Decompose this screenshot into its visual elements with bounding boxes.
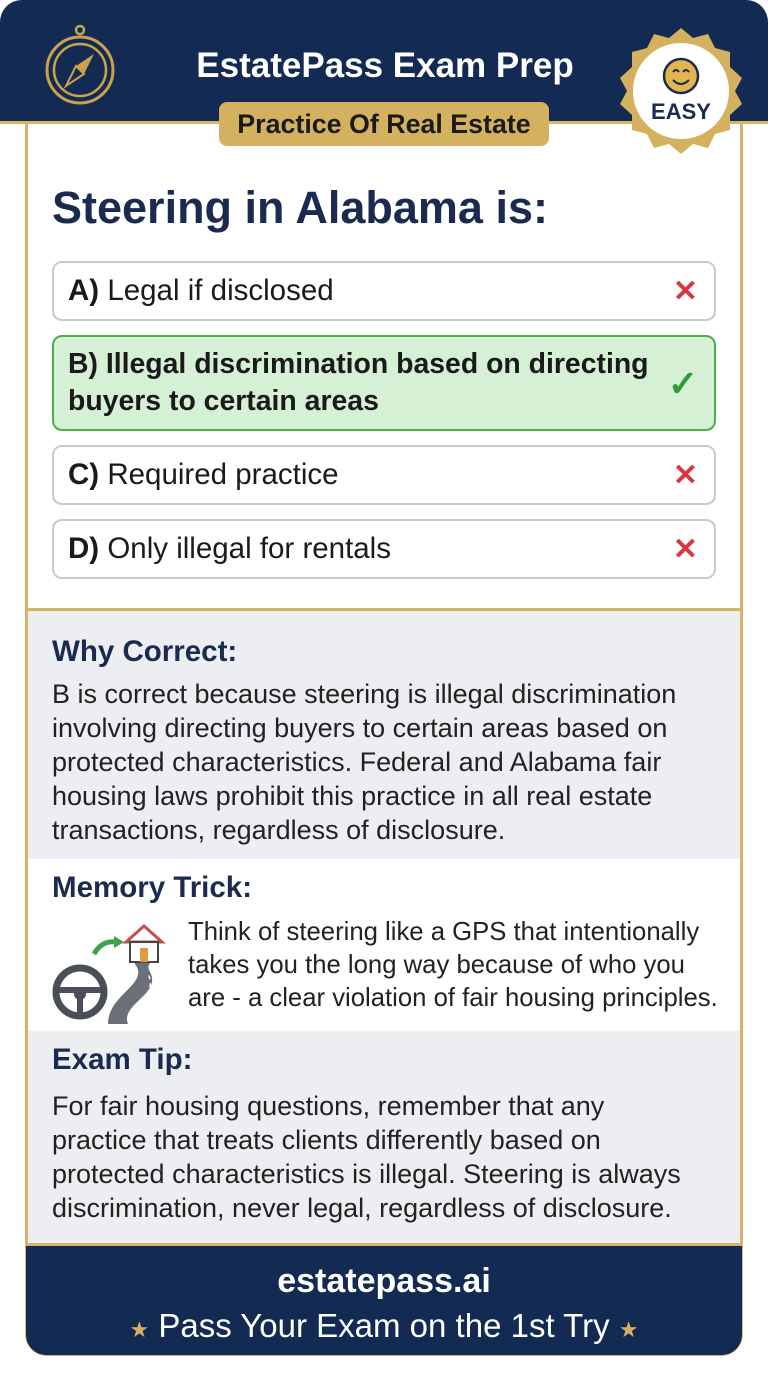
panel: exam tip: discrimination, never legal, regardless of disclosure. — [52, 1193, 672, 1223]
panel: memory trick: takes you the long way because of who you — [188, 951, 685, 979]
icon: steering wheel road house — [52, 924, 166, 1024]
question: Steering in Alabama is: — [52, 182, 548, 233]
panel: why correct: Why Correct: — [52, 635, 237, 668]
option C — [52, 445, 716, 505]
icon: compass — [46, 24, 114, 104]
option D — [52, 519, 716, 579]
panel: why correct: housing laws prohibit this practice in all real estate — [52, 781, 652, 811]
panel: exam tip: For fair housing questions, remember that any — [52, 1091, 604, 1121]
panel: why correct: involving directing buyers to certain areas based on — [52, 713, 667, 743]
panel: memory trick: Memory Trick: — [52, 871, 252, 904]
panel: exam tip — [28, 1031, 740, 1243]
option D: Only illegal for rentals — [107, 532, 391, 565]
option C: ✕ — [673, 458, 698, 492]
panel: exam tip: practice that treats clients differently based on — [52, 1125, 601, 1155]
option C: Required practice — [107, 458, 339, 491]
panel: why correct — [28, 608, 740, 859]
option A: Legal if disclosed — [107, 274, 334, 307]
option A — [52, 261, 716, 321]
footer: ★ Pass Your Exam on the 1st Try ★ — [129, 1307, 639, 1344]
footer — [26, 1243, 742, 1355]
panel: memory trick: Think of steering like a GPS that intentionally — [188, 918, 699, 946]
title: EstatePass Exam Prep — [196, 46, 574, 85]
panel: exam tip: protected characteristics is illegal. Steering is always — [52, 1159, 681, 1189]
option B correct — [52, 335, 716, 431]
option D: ✕ — [673, 532, 698, 566]
header — [0, 0, 768, 124]
subtitle badge: Practice Of Real Estate — [237, 109, 531, 139]
option C: C) — [68, 458, 99, 491]
panel: memory trick — [28, 859, 740, 1031]
panel: why correct: B is correct because steering is illegal discrimination — [52, 679, 676, 709]
panel: why correct: transactions, regardless of disclosure. — [52, 815, 505, 845]
option B correct: buyers to certain areas — [68, 385, 379, 417]
option A: ✕ — [673, 274, 698, 308]
option A: A) — [68, 274, 99, 307]
panel: why correct: protected characteristics. Federal and Alabama fair — [52, 747, 661, 777]
badge: easy — [620, 28, 742, 154]
badge: easy: EASY — [651, 99, 711, 124]
option D: D) — [68, 532, 99, 565]
panel: memory trick: are - a clear violation of fair housing principles. — [188, 984, 718, 1012]
footer: estatepass.ai — [277, 1262, 491, 1300]
subtitle badge — [219, 102, 549, 146]
option B correct: ✓ — [668, 362, 698, 404]
option B correct: B) Illegal discrimination based on directing — [68, 348, 649, 380]
panel: exam tip: Exam Tip: — [52, 1043, 192, 1076]
